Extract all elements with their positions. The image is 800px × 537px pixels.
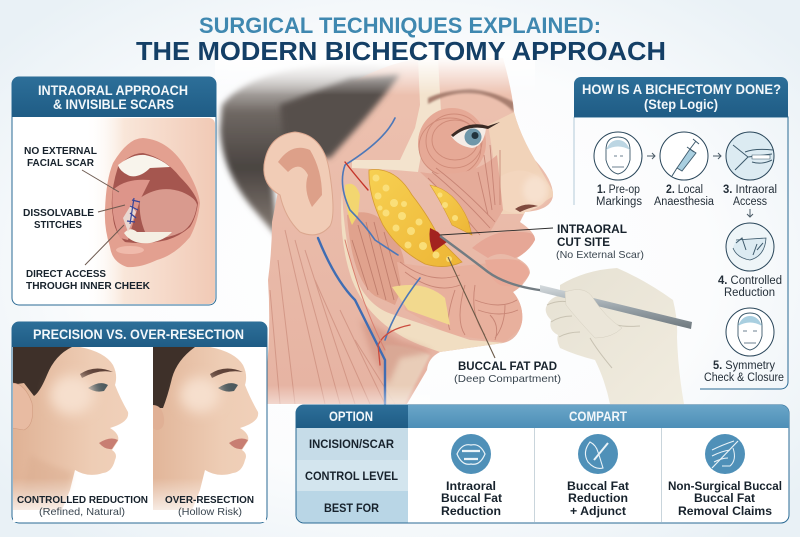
caption: controlled reduction: (Refined, Natural) [39, 506, 125, 518]
caption: controlled reduction: CONTROLLED REDUCTION [17, 494, 148, 506]
option: buccal fat reduction plus adjunct: Buccal Fat [567, 481, 629, 493]
beige temple and forehead band [352, 58, 441, 172]
panel header [574, 77, 788, 117]
label: buccal fat pad [454, 361, 561, 385]
row: best for [296, 491, 408, 522]
step 5: symmetry check [704, 308, 784, 384]
label: buccal fat pad: BUCCAL FAT PAD [458, 361, 557, 373]
jawline beige band [341, 190, 505, 352]
option: intraoral buccal fat reduction [441, 434, 502, 518]
eye [451, 126, 486, 148]
callout lines [82, 170, 125, 265]
callout labels: DISSOLVABLE [23, 207, 94, 219]
row: best for: BEST FOR [324, 503, 380, 515]
caption: over-resection: OVER-RESECTION [165, 494, 254, 506]
brow [428, 89, 514, 112]
panel: intraoral approach [12, 77, 216, 305]
step 5: symmetry check: 5. Symmetry [713, 360, 775, 372]
nose [532, 202, 544, 210]
heading text: INTRAORAL APPROACH [38, 83, 188, 98]
lips [472, 231, 535, 258]
panel: precision vs over-resection [10, 322, 267, 523]
callout labels: THROUGH INNER CHEEK [26, 280, 150, 292]
neck muscles [270, 230, 395, 404]
leader lines [440, 228, 553, 358]
caption: controlled reduction [17, 494, 148, 518]
face: controlled reduction [13, 347, 128, 522]
row: control level: CONTROL LEVEL [305, 471, 398, 483]
title: SURGICAL TECHNIQUES EXPLAINED: [199, 13, 601, 38]
top fade into background [215, 50, 535, 95]
heading text [38, 83, 188, 112]
lower face muscles [397, 260, 523, 329]
deep neck muscle [360, 320, 432, 385]
step 3: intraoral access: Access [733, 196, 767, 208]
central anatomical illustration [215, 50, 555, 405]
header: compart [408, 405, 789, 428]
option: buccal fat reduction plus adjunct: Reduction [568, 493, 628, 505]
row: control level [296, 460, 408, 491]
option: buccal fat reduction plus adjunct: + Adjunct [570, 506, 626, 518]
step 2: local anaesthesia [654, 132, 715, 208]
step 4: controlled reduction: Reduction [724, 287, 775, 299]
label: intraoral cut site: CUT SITE [557, 237, 610, 249]
caption: over-resection: (Hollow Risk) [178, 506, 242, 518]
fat lobule texture [372, 174, 458, 262]
step 3: intraoral access [723, 132, 777, 208]
option: intraoral buccal fat reduction: Buccal Fat [441, 493, 502, 505]
finger creases [547, 301, 640, 368]
header: option [296, 405, 408, 428]
option: buccal fat reduction plus adjunct [567, 434, 629, 518]
arrow [647, 153, 655, 159]
option: non-surgical removal claims: Buccal Fat [694, 493, 755, 505]
panel header [12, 322, 267, 347]
throat [385, 345, 430, 404]
glove [546, 268, 684, 404]
callout labels: FACIAL SCAR [27, 157, 94, 169]
arrow [713, 153, 721, 159]
nose and upper cheek [488, 112, 555, 214]
option: non-surgical removal claims: Removal Claims [678, 506, 772, 518]
callout labels: DIRECT ACCESS [26, 268, 106, 280]
title: THE MODERN BICHECTOMY APPROACH [136, 38, 666, 66]
heading text: PRECISION VS. OVER-RESECTION [33, 327, 244, 342]
mid face muscles [420, 155, 503, 235]
face: over-resection [153, 347, 266, 522]
label: intraoral cut site [556, 224, 644, 261]
heading text: & INVISIBLE SCARS [53, 97, 174, 112]
step 1: pre-op markings: Markings [596, 196, 642, 208]
mouth illustration [103, 118, 215, 304]
small parotid fat [345, 184, 360, 225]
orbicularis muscle [418, 108, 486, 178]
step 2: local anaesthesia: 2. Local [666, 184, 703, 196]
caption: over-resection [165, 494, 254, 518]
label: intraoral cut site: INTRAORAL [557, 224, 627, 236]
arrow [747, 209, 753, 217]
callout labels: NO EXTERNAL [24, 145, 98, 157]
panel header [12, 77, 216, 117]
row: incision/scar: INCISION/SCAR [309, 439, 395, 451]
heading text [582, 82, 781, 112]
option: intraoral buccal fat reduction: Reduction [441, 506, 501, 518]
heading text: (Step Logic) [644, 97, 718, 112]
label: intraoral cut site: (No External Scar) [556, 249, 644, 261]
hair [220, 63, 408, 238]
blood vessels [318, 118, 420, 404]
title [136, 13, 666, 66]
step 5: symmetry check: Check & Closure [704, 372, 784, 384]
step 3: intraoral access: 3. Intraoral [723, 184, 777, 196]
main fat pad [369, 170, 462, 267]
comparison table [296, 405, 789, 523]
step 1: pre-op markings [594, 132, 642, 208]
step 4: controlled reduction [718, 223, 782, 299]
masseter muscle [347, 212, 405, 305]
intraoral cut site [429, 228, 447, 252]
header: option: OPTION [329, 409, 373, 424]
option: intraoral buccal fat reduction: Intraoral [446, 481, 496, 493]
step 1: pre-op markings: 1. Pre-op [597, 184, 640, 196]
option: non-surgical removal claims [668, 434, 782, 518]
head and neck base [263, 58, 553, 404]
upper fat lobe [430, 185, 472, 235]
bottom fade of the neck [255, 385, 430, 405]
surgical hand with instrument [440, 236, 692, 404]
ear [264, 132, 333, 235]
submandibular fat [392, 285, 450, 325]
panel: how is a bichectomy done [574, 77, 788, 389]
callout labels: STITCHES [34, 219, 82, 231]
heading text: HOW IS A BICHECTOMY DONE? [582, 82, 781, 97]
row: incision/scar [296, 428, 408, 460]
option: non-surgical removal claims: Non-Surgical Buccal [668, 481, 782, 493]
temple hair [280, 74, 400, 158]
label: buccal fat pad: (Deep Compartment) [454, 373, 561, 385]
step 2: local anaesthesia: Anaesthesia [654, 196, 715, 208]
step 4: controlled reduction: 4. Controlled [718, 275, 782, 287]
thumb [565, 290, 622, 338]
callout labels [23, 145, 150, 292]
header: compart: COMPART [569, 409, 628, 424]
instrument [440, 236, 556, 292]
